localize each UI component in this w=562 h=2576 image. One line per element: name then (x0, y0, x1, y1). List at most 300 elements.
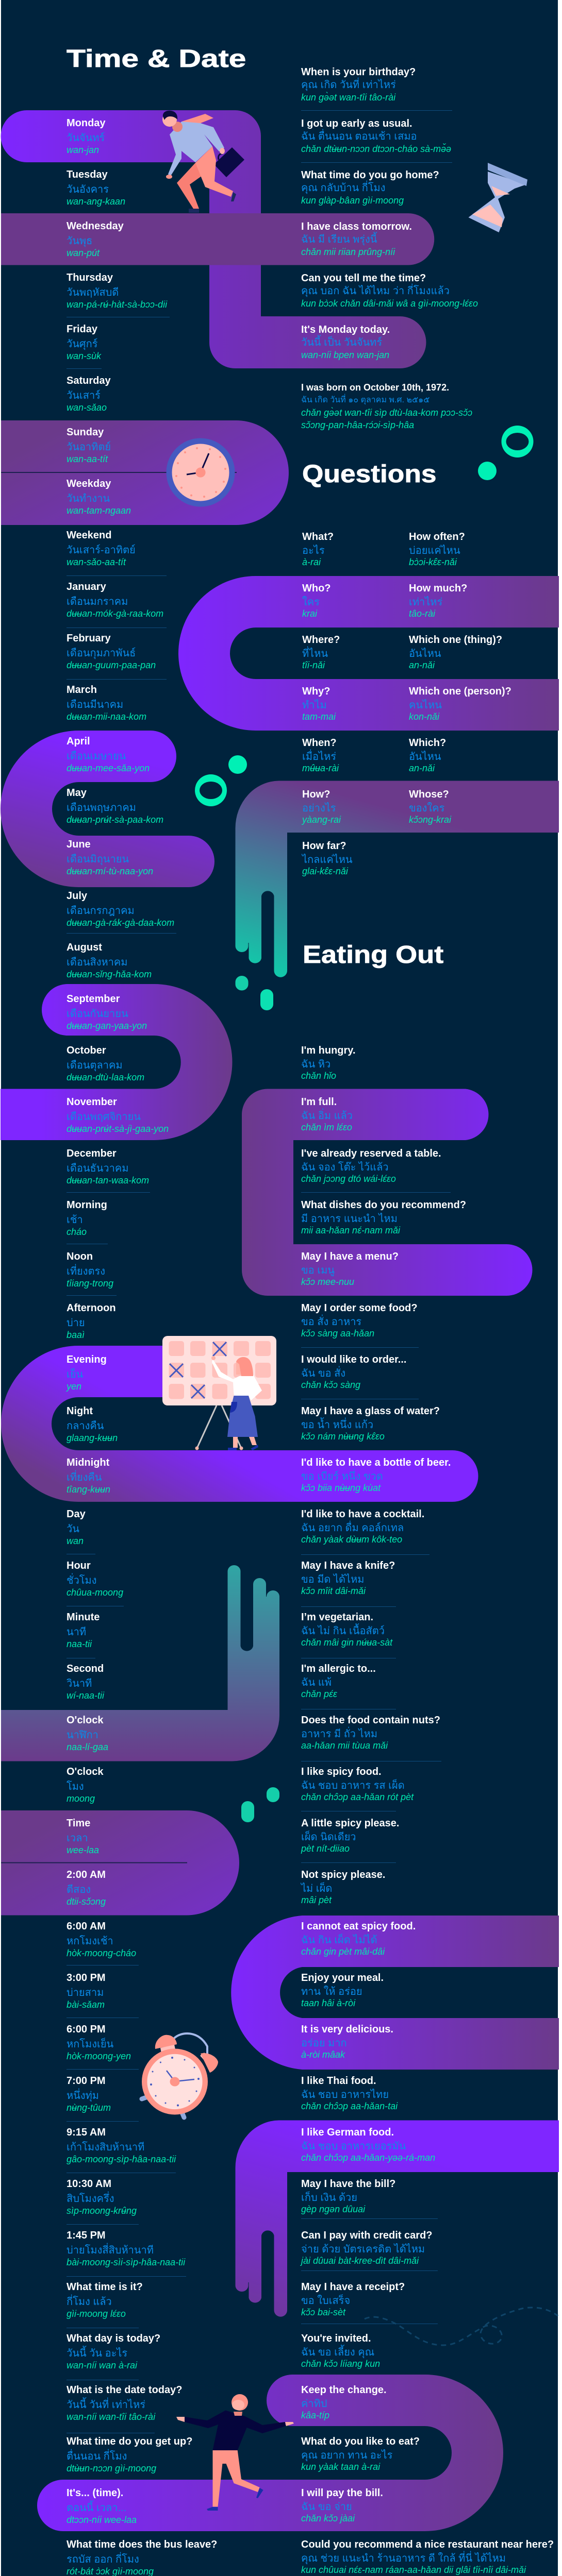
ribbon: Sunday and Weekday band (1, 420, 289, 525)
item: October: dʉʉan-dtù-laa-kom (67, 1072, 144, 1082)
item: Enjoy your meal (301, 1973, 559, 2024)
item: Weekend: wan-sǎo-aa-tít (67, 557, 126, 567)
item: Which? (409, 738, 553, 789)
item: Why?: ทำไม (302, 700, 327, 711)
ribbon: How band with teal drips (235, 781, 559, 1010)
item: I like German food: ฉัน ชอบ อาหารเยอรมัน (301, 2141, 406, 2152)
item: How?: อย่างไร (302, 803, 336, 814)
item: I have class tomorrow: chǎn mii riian prûng-níi (301, 247, 395, 257)
item: How much?: tâo-rài (409, 608, 435, 619)
item: Time (67, 1818, 99, 1855)
icon: green dot top (478, 462, 497, 480)
item: 10:30 AM: sìp-moong-krʉ̂ng (67, 2206, 137, 2216)
item: 9:15 AM (67, 2127, 273, 2179)
item: October (67, 1045, 144, 1082)
item: I've already reserved a table (301, 1148, 559, 1200)
item: May I have a knife?: May I have a knife? (301, 1560, 395, 1571)
item: Enjoy your meal: ทาน ให้ อร่อย (301, 1986, 362, 1997)
item: It's (time) (67, 2488, 273, 2539)
item: March: March (67, 684, 97, 696)
item: What time is it? (67, 2282, 273, 2333)
item: 2:00 AM: 2:00 AM (67, 1869, 106, 1880)
item: I cannot eat spicy food: chǎn gin pèt mâi-dâi (301, 1946, 385, 1957)
item: 6:00 PM: hòk-moong-yen (67, 2051, 131, 2061)
item: What dishes do you recommend?: มี อาหาร แนะนำ ไหม (301, 1213, 398, 1225)
item: You're invited (301, 2333, 559, 2385)
item: May I order some food?: ขอ สั่ง อาหาร (301, 1316, 361, 1328)
item: Wednesday: wan-pút (67, 248, 100, 258)
item: Not spicy please: Not spicy please. (301, 1869, 385, 1880)
item: Monday: wan-jan (67, 145, 99, 155)
item: When is your birthday?: kun gə̀ət wan-tîi tâo-rài (301, 92, 395, 103)
item: May I have a menu?: May I have a menu? (301, 1251, 399, 1262)
panel: vocabulary column (66, 117, 217, 2576)
item: I would like to order (301, 1354, 559, 1406)
item: 6:00 PM (67, 2024, 273, 2076)
item: Saturday: Saturday (67, 375, 111, 386)
item: 10:30 AM: 10:30 AM (67, 2178, 111, 2190)
item: How far?: glai-kɛ̂ɛ-nǎi (302, 866, 348, 876)
item: Sunday: wan-aa-tít (67, 454, 108, 464)
item: I'm allergic to: ฉัน แพ้ (301, 1677, 332, 1688)
item: I like Thai food: chǎn chɔ̂ɔp aa-hǎan-tai (301, 2101, 398, 2111)
item: Can I pay with credit card?: jài dûuai bàt-kree-dìt dâi-mǎi (301, 2256, 419, 2266)
item: Afternoon (67, 1302, 116, 1340)
item: Weekend: Weekend (67, 530, 111, 541)
item: Why? (302, 686, 405, 738)
item: Minute: naa-tii (67, 1639, 92, 1649)
item: Sunday: Sunday (67, 427, 104, 438)
item: 7:00 PM: nʉ̀ng-tûum (67, 2103, 111, 2113)
item: I will pay the bill: ฉัน ขอ จ่าย (301, 2501, 352, 2513)
item: When?: เมื่อไหร่ (302, 751, 336, 762)
item: Does the food contain nuts?: aa-hǎan mii tùua mǎi (301, 1740, 388, 1751)
ribbon: Evening to Midnight C band (1, 1346, 478, 1502)
item: It is very delicious: อร่อย มาก (301, 2038, 347, 2049)
item: I'm hungry: I'm hungry. (301, 1045, 356, 1056)
item: Can you tell me the time?: kun bɔ̀ɔk chǎn dâi-mǎi wâ a gìi-moong-lɛ́ɛo (301, 298, 478, 309)
item: Why?: tam-mai (302, 711, 336, 722)
item: What time does the bus leave?: What time does the bus leave? (67, 2539, 217, 2550)
item: Monday (67, 117, 106, 155)
item: 9:15 AM: gâo-moong-sìp-hâa-naa-tii (67, 2154, 176, 2164)
item: I like spicy food: I like spicy food. (301, 1766, 382, 1777)
item: Friday: wan-sùk (67, 351, 101, 361)
item: It is very delicious (301, 2024, 559, 2076)
item: May I have a menu?: kɔ̌ɔ mee-nuu (301, 1277, 354, 1287)
item: O'clock moong: moong (67, 1793, 95, 1804)
ribbon: Keep the change hook (37, 2375, 503, 2531)
item: Day: วัน (67, 1523, 79, 1535)
item: Weekend: วันเสาร์-อาทิตย์ (67, 545, 136, 556)
item: April: April (67, 736, 90, 747)
item: Can I pay with credit card?: Can I pay with credit card? (301, 2230, 433, 2241)
item: I like Thai food (301, 2076, 559, 2127)
item: Could you recommend a nice restaurant near here? (301, 2539, 559, 2576)
item: May I have a receipt? (301, 2282, 559, 2333)
item: I got up early as usual: ฉัน ตื่นนอน ตอนเช้า เสมอ (301, 131, 417, 142)
item: I like spicy food: chǎn chɔ̂ɔp aa-hǎan rót pèt (301, 1792, 414, 1802)
icon: green ring middle (195, 774, 227, 806)
item: Time: Time (67, 1818, 90, 1829)
item: What do you like to eat?: คุณ อยาก ทาน อะไร (301, 2450, 392, 2461)
item: 7:00 PM: หนึ่งทุ่ม (67, 2090, 99, 2102)
item: Time: wee-laa (67, 1845, 99, 1855)
item: Keep the change (301, 2385, 559, 2436)
item: I've already reserved a table: ฉัน จอง โต๊ะ ไว้แล้ว (301, 1162, 389, 1173)
item: Hour: chûua-moong (67, 1587, 123, 1598)
item: Night: Night (67, 1405, 93, 1417)
item: February (67, 633, 156, 670)
item: Morning: cháo (67, 1227, 87, 1237)
item: When is your birthday? (301, 67, 507, 118)
item: Who?: krai (302, 608, 317, 619)
item: March (67, 684, 146, 722)
item: 3:00 PM: บ่ายสาม (67, 1987, 104, 1998)
item: Keep the change: kâa-típ (301, 2410, 329, 2420)
item: January: January (67, 581, 106, 592)
item: March: dʉʉan-mii-naa-kom (67, 711, 146, 722)
icon: hourglass (468, 163, 527, 232)
item: Whose? (409, 789, 553, 841)
item: Whose?: ของใคร (409, 803, 444, 814)
item: Midnight: เที่ยงคืน (67, 1472, 102, 1483)
item: Day: Day (67, 1509, 86, 1520)
item: May I have a menu? (301, 1251, 559, 1303)
item: May I have a knife?: ขอ มีด ได้ไหม (301, 1574, 364, 1585)
item: May I have the bill?: May I have the bill? (301, 2178, 395, 2190)
item: Which?: อันไหน (409, 751, 441, 762)
item: August: เดือนสิงหาคม (67, 957, 127, 968)
item: How far? (302, 841, 405, 892)
item: 7:00 PM (67, 2076, 273, 2127)
item: April: dʉʉan-mee-sǎa-yon (67, 763, 150, 773)
item: Which one (person)? (409, 686, 553, 738)
item: Night: กลางคืน (67, 1420, 104, 1432)
icon: running man with briefcase (162, 111, 244, 213)
item: Sunday (67, 427, 111, 464)
item: Afternoon: baaì (67, 1330, 85, 1340)
item: When?: mʉ̂ʉa-rài (302, 763, 339, 773)
item: I have class tomorrow: I have class tomorrow. (301, 221, 412, 232)
item: 1:45 PM: bài-moong-sìi-sìp-hâa-naa-tii (67, 2257, 185, 2267)
item: O'clock naa-lí-gaa: O'clock (67, 1715, 103, 1726)
item: May I have a knife? (301, 1561, 559, 1612)
item: I'd like to have a cocktail: I'd like to have a cocktail. (301, 1509, 424, 1520)
item: Noon: Noon (67, 1251, 93, 1262)
ribbon: I cannot eat C band (231, 1916, 559, 2070)
item: Noon (67, 1251, 113, 1289)
item: November: dʉʉan-prʉ́t-sà-jì-gaa-yon (67, 1124, 169, 1134)
icon: alarm clock (142, 2033, 218, 2117)
item: January: เดือนมกราคม (67, 596, 128, 607)
item: May (67, 787, 163, 825)
text block: I was born on October 10th, 1972: chǎn gə̀ət wan-tîi sìp dtù-laa-kom pɔɔ-sɔ̌ɔ (301, 408, 472, 418)
item: What time is it?: What time is it? (67, 2281, 143, 2293)
item: It's Monday today: วันนี้ เป็น วันจันทร์ (301, 337, 382, 348)
item: Noon: เที่ยงตรง (67, 1266, 105, 1277)
item: I'd like to have a cocktail (301, 1509, 559, 1561)
item: Thursday: วันพฤหัสบดี (67, 287, 119, 298)
item: May I have a glass of water?: kɔ̌ɔ nám nʉ̀ʉng kɛ̂ɛo (301, 1431, 385, 1442)
item: Friday: วันศุกร์ (67, 338, 97, 350)
item: I like spicy food (301, 1767, 559, 1818)
item: Second: wí-naa-tii (67, 1690, 104, 1701)
item: Midnight (67, 1457, 110, 1495)
item: 6:00 PM: 6:00 PM (67, 2024, 106, 2035)
ribbon: German food band with drips (235, 2121, 559, 2317)
item: How?: yàang-rai (302, 815, 341, 825)
item: What do you like to eat?: kun yàak taan à-rai (301, 2462, 380, 2472)
item: It's (time): dtɔɔn-níi wee-laa (67, 2515, 137, 2525)
item: Minute: นาที (67, 1626, 86, 1638)
item: November: เดือนพฤศจิกายน (67, 1111, 141, 1123)
item: August: August (67, 942, 102, 953)
item: 10:30 AM: สิบโมงครึ่ง (67, 2193, 114, 2205)
item: Which one (thing)?: อันไหน (409, 648, 441, 659)
item: 6:00 AM: 6:00 AM (67, 1921, 106, 1932)
item: A little spicy please (301, 1818, 559, 1870)
item: You're invited: chǎn kɔ̌ɔ líiang kun (301, 2359, 380, 2369)
item: What? (302, 532, 405, 583)
item: Enjoy your meal: taan hâi à-ròi (301, 1998, 355, 2008)
item: July (67, 890, 174, 928)
item: October: October (67, 1045, 106, 1056)
item: O'clock naa-lí-gaa: naa-lí-gaa (67, 1742, 108, 1752)
item: May I have the bill?: เก็บ เงิน ด้วย (301, 2192, 357, 2204)
item: 3:00 PM: 3:00 PM (67, 1972, 106, 1984)
item: June: dʉʉan-mí-tù-naa-yon (67, 866, 153, 876)
item: November (67, 1096, 169, 1134)
item: What time does the bus leave?: รถบัส ออก กี่โมง (67, 2554, 139, 2565)
item: Saturday: wan-sǎao (67, 402, 107, 413)
item: Weekday: Weekday (67, 478, 111, 489)
item: You're invited: ฉัน ขอ เลี้ยง คุณ (301, 2347, 374, 2358)
item: What?: What? (302, 531, 334, 543)
item: I will pay the bill: chǎn kɔ̌ɔ jàai (301, 2513, 355, 2523)
item: Can I pay with credit card? (301, 2230, 559, 2282)
item: I'd like to have a cocktail: chǎn yàak dʉ̀ʉm kôk-teo (301, 1534, 402, 1545)
item: It's (time): It's... (time). (67, 2487, 123, 2499)
item: What is the date today?: What is the date today? (67, 2384, 182, 2396)
item: Why?: Why? (302, 686, 330, 697)
item: Wednesday (67, 221, 124, 258)
item: Who? (302, 583, 405, 635)
item: Saturday (67, 375, 111, 413)
item: Can I pay with credit card?: จ่าย ด้วย บัตรเครดิต ได้ไหม (301, 2244, 425, 2255)
dashed flight path (365, 2308, 558, 2345)
text block: I was born on October 10th, 1972: ฉัน เกิด วันที่ ๑๐ ตุลาคม พ.ศ. ๒๕๑๕ (301, 396, 429, 404)
item: What time does the bus leave? (67, 2539, 273, 2576)
item: I like German food: I like German food. (301, 2127, 394, 2138)
item: I'm vegetarian: ฉัน ไม่ กิน เนื้อสัตว์ (301, 1625, 385, 1637)
item: O'clock naa-lí-gaa (67, 1715, 108, 1752)
item: Evening: Evening (67, 1354, 107, 1365)
item: Can you tell me the time?: คุณ บอก ฉัน ได้ไหม ว่า กี่โมงแล้ว (301, 285, 450, 297)
item: I would like to order: I would like to order... (301, 1354, 406, 1365)
item: How?: How? (302, 789, 330, 800)
item: 7:00 PM: 7:00 PM (67, 2075, 106, 2087)
item: What day is today?: What day is today? (67, 2333, 160, 2344)
item: Weekday (67, 478, 131, 516)
item: February: เดือนกุมภาพันธ์ (67, 648, 136, 659)
item: Minute: Minute (67, 1612, 100, 1623)
item: What time do you go home?: คุณ กลับบ้าน กี่โมง (301, 182, 386, 194)
item: Tuesday (67, 169, 125, 207)
item: Where?: ที่ไหน (302, 648, 328, 659)
item: October: เดือนตุลาคม (67, 1060, 123, 1071)
item: Could you recommend a nice restaurant near here?: Could you recommend a nice restaurant near here? (301, 2539, 554, 2550)
item: September: September (67, 993, 120, 1005)
item: 2:00 AM: ตีสอง (67, 1884, 91, 1895)
item: When is your birthday?: คุณ เกิด วันที่ เท่าไหร่ (301, 79, 396, 91)
item: March: เดือนมีนาคม (67, 699, 123, 710)
item: Weekday: wan-tam-ngaan (67, 505, 131, 516)
item: What time is it?: กี่โมง แล้ว (67, 2296, 112, 2308)
item: Friday (67, 324, 102, 361)
item: July: เดือนกรกฎาคม (67, 905, 135, 917)
item: Second (67, 1663, 104, 1701)
item: What do you like to eat? (301, 2436, 559, 2488)
item: Wednesday: วันพุธ (67, 235, 92, 247)
item: Which one (thing)? (409, 635, 553, 686)
item: What is the date today? (67, 2385, 273, 2436)
item: I've already reserved a table: chǎn jɔɔng dtó wái-lɛ́ɛo (301, 1174, 396, 1184)
item: 9:15 AM: เก้าโมงสิบห้านาที (67, 2142, 144, 2153)
item: Enjoy your meal: Enjoy your meal. (301, 1972, 384, 1984)
item: Evening (66, 1354, 107, 1392)
item: How? (302, 789, 405, 841)
item: I'm allergic to (301, 1664, 559, 1715)
item: May I have a glass of water?: ขอ น้ำ หนึ่ง แก้ว (301, 1419, 373, 1431)
item: May I order some food?: May I order some food? (301, 1302, 418, 1314)
item: Day (67, 1509, 86, 1546)
item: 2:00 AM (67, 1869, 106, 1907)
item: How much?: เท่าไหร่ (409, 597, 442, 608)
item: December: เดือนธันวาคม (67, 1163, 128, 1174)
item: Which one (thing)?: Which one (thing)? (409, 634, 502, 646)
item: Keep the change: Keep the change. (301, 2384, 387, 2396)
item: What dishes do you recommend?: What dishes do you recommend? (301, 1199, 466, 1211)
item: Morning: Morning (67, 1199, 107, 1211)
item: A little spicy please: pèt nít-diiao (301, 1843, 350, 1854)
item: Thursday: Thursday (67, 272, 113, 283)
ribbon: September to November hook (1, 984, 233, 1140)
item: It's Monday today: wan-níi bpen wan-jan (301, 350, 389, 360)
item: Afternoon: บ่าย (67, 1317, 85, 1329)
ribbon: O'clock band with teal fingers (1, 1565, 279, 1822)
item: When?: When? (302, 737, 337, 749)
item: Thursday (67, 272, 167, 310)
item: Wednesday: Wednesday (67, 221, 124, 232)
ribbon: Eating Out bracket band (242, 1089, 532, 1296)
item: Morning: เช้า (67, 1214, 83, 1226)
item: September (67, 993, 147, 1031)
text block: I was born on October 10th, 1972: I was born on October 10th, 1972. (301, 382, 449, 393)
item: I cannot eat spicy food: I cannot eat spicy food. (301, 1921, 416, 1932)
item: Minute (67, 1612, 100, 1649)
item: I'm hungry: chǎn hǐo (301, 1071, 336, 1081)
icon: green dot middle (228, 755, 247, 774)
item: 1:45 PM: บ่ายโมงสี่สิบห้านาที (67, 2245, 154, 2256)
item: Not spicy please (301, 1870, 559, 1921)
item: Day: wan (67, 1536, 84, 1546)
item: Does the food contain nuts?: Does the food contain nuts? (301, 1715, 440, 1726)
item: May I have a receipt?: kɔ̌ɔ bai-sèt (301, 2307, 345, 2317)
item: 10:30 AM (67, 2179, 273, 2230)
item: Whose?: Whose? (409, 789, 449, 800)
item: May I order some food?: kɔ̌ɔ sàng aa-hǎan (301, 1328, 374, 1338)
item: Who?: ใคร (302, 597, 320, 608)
item: I'm vegetarian: chǎn mâi gin nʉ́ʉa-sàt (301, 1637, 392, 1648)
ribbon: Wednesday band (1, 213, 434, 265)
item: January (67, 581, 163, 619)
item: I'm full: I'm full. (301, 1096, 337, 1108)
item: Sunday: วันอาทิตย์ (67, 442, 111, 453)
item: O'clock moong (67, 1766, 103, 1804)
item: Could you recommend a nice restaurant near here?: kun chûuai nɛ́ɛ-nam ráan-aa-hǎan dii glâi tîi-nîi dâi-mǎi (301, 2565, 526, 2575)
item: Time: เวลา (67, 1833, 88, 1844)
item: I'd like to have a bottle of beer: kɔ̌ɔ biia nʉ̀ʉng kùat (301, 1483, 381, 1493)
item: 9:15 AM: 9:15 AM (67, 2127, 106, 2138)
item: I will pay the bill: I will pay the bill. (301, 2487, 383, 2499)
item: A little spicy please: เผ็ด นิดเดียว (301, 1832, 356, 1843)
item: 3:00 PM: bài-sǎam (67, 1999, 105, 2010)
item: O'clock moong: โมง (67, 1781, 84, 1792)
item: Where? (302, 635, 405, 686)
item: May I have a receipt?: May I have a receipt? (301, 2281, 405, 2293)
item: How much?: How much? (409, 583, 467, 594)
item: Tuesday: wan-ang-kaan (67, 196, 125, 207)
icon: woman at calendar (162, 1336, 276, 1450)
item: It's (time): ตอนนี้ เวลา... (67, 2502, 126, 2514)
item: Thursday: wan-pá-rʉ́-hàt-sà-bɔɔ-dii (67, 299, 167, 310)
item: Morning (67, 1199, 107, 1237)
item: I'm vegetarian: I’m vegetarian. (301, 1612, 373, 1623)
item: I'm hungry (301, 1045, 559, 1097)
item: May: เดือนพฤษภาคม (67, 802, 136, 814)
item: It's Monday today (301, 325, 507, 376)
item: It is very delicious: à-ròi mâak (301, 2049, 345, 2060)
item: November: November (67, 1096, 117, 1108)
item: Could you recommend a nice restaurant near here?: คุณ ช่วย แนะนำ ร้านอาหาร ดี ใกล้ ที่นี่ ได้ไหม (301, 2553, 506, 2564)
item: May I have a glass of water? (301, 1406, 559, 1458)
item: May I have a glass of water?: May I have a glass of water? (301, 1405, 440, 1417)
item: Midnight: Midnight (67, 1457, 109, 1468)
item: Which?: Which? (409, 737, 446, 749)
ribbon: April to June S band (1, 731, 214, 887)
heading: Eating Out: Eating Out (303, 941, 443, 969)
item: What time do you get up?: dtʉ̀ʉn-nɔɔn gìi-moong (67, 2463, 156, 2473)
item: Monday: วันจันทร์ (67, 132, 105, 144)
item: What time do you go home?: kun glàp-bâan gìi-moong (301, 195, 404, 206)
item: Does the food contain nuts?: อาหาร มี ถั่ว ไหม (301, 1728, 377, 1740)
item: 6:00 AM: หกโมงเช้า (67, 1936, 113, 1947)
item: May: May (67, 787, 87, 799)
item: What?: อะไร (302, 545, 325, 556)
item: Hour: Hour (67, 1560, 91, 1571)
item: I'm allergic to: chǎn pɛ́ɛ (301, 1689, 337, 1699)
item: What time do you go home? (301, 170, 507, 222)
ribbon: Questions C band (178, 576, 559, 731)
item: What time do you go home?: What time do you go home? (301, 170, 439, 181)
item: I cannot eat spicy food (301, 1921, 559, 1973)
item: July: July (67, 890, 87, 902)
item: May I have the bill? (301, 2179, 559, 2230)
item: I'd like to have a bottle of beer: I'd like to have a bottle of beer. (301, 1457, 451, 1468)
item: I'm vegetarian (301, 1612, 559, 1664)
heading: Questions: Questions (302, 461, 437, 488)
